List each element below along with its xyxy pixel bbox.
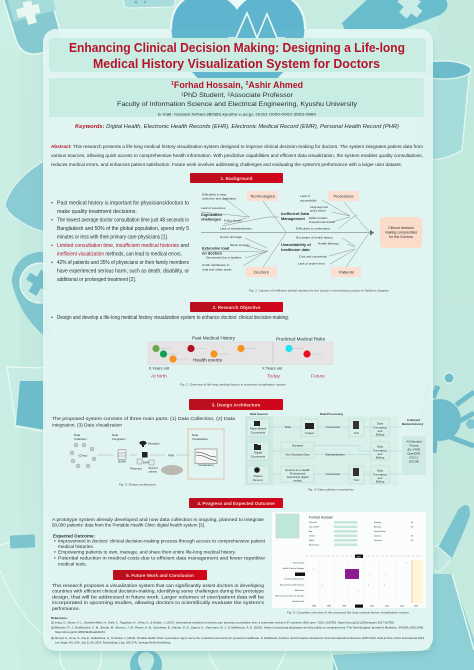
source: patient memory: Memory xyxy=(253,478,264,482)
age ruler: 0000 xyxy=(356,556,361,558)
effect box: clinical decision making complexities: for the Doctors xyxy=(389,235,413,239)
conclusion paragraph xyxy=(52,583,265,612)
column labels: Data Processing xyxy=(320,412,343,416)
collected medical history box: Format xyxy=(410,444,419,448)
section labels: Integration xyxy=(112,437,126,441)
fishbone cause labels: policy issues xyxy=(310,208,326,212)
health event dots xyxy=(152,345,322,363)
timeline band xyxy=(148,342,333,364)
timeline headings xyxy=(192,336,326,342)
icon: leaf shape left xyxy=(5,160,46,232)
patient info fields: Alcoholic xyxy=(374,526,381,528)
category row labels: Immunization xyxy=(293,562,304,564)
fishbone cause labels: Lack of resources xyxy=(201,206,226,210)
row 3: data formatting xyxy=(371,466,389,484)
caption: fig 2: Fig. 2. Overview of life-long medical history in proposed visualization system xyxy=(180,382,287,386)
icon: stethoscope lines bottom xyxy=(60,645,338,670)
progress paragraph xyxy=(52,517,264,528)
effect box: clinical decision making complexities: making complexities xyxy=(385,230,417,234)
processing background xyxy=(245,416,398,486)
heading: 5. Future Work and Conclusion xyxy=(113,570,207,580)
collected medical history box: DICOM) xyxy=(409,460,419,464)
cause box: Technologies xyxy=(247,191,278,201)
fishbone cause labels: rural and urban areas xyxy=(202,268,232,272)
category row labels: Non-Communicable Disease xyxy=(280,584,304,586)
connector lines xyxy=(97,454,190,456)
year axis xyxy=(312,606,418,608)
icon: bandage top left xyxy=(2,0,64,54)
year axis: 1980 xyxy=(312,606,316,608)
chart: life-long medical history timeline xyxy=(148,336,333,386)
cause box: Patients: Patients xyxy=(339,270,354,274)
patient info fields: Gender xyxy=(309,536,315,538)
row 1: scan, images, conversion, text xyxy=(285,419,364,436)
fishbone cause labels: collection and digitization xyxy=(202,196,237,200)
effect box: clinical decision making complexities: Clinical decision xyxy=(388,226,414,230)
row 2: standard data xyxy=(281,442,345,458)
conclusion paragraph: incorporated in upcoming studies, allowing doctors to scientifically evaluate the system's xyxy=(52,600,265,606)
conclusion paragraph: design, that will be addressed in future work. Larger volumes of user/patient data will be xyxy=(52,594,264,600)
patient info fields: No xyxy=(411,522,413,524)
small event marks xyxy=(313,562,407,592)
row 3: queries, conversion, text: Queries by a Health xyxy=(285,468,310,472)
year axis: 2015 xyxy=(400,606,404,608)
data visualization box: Visualization xyxy=(198,463,214,467)
section labels: Data xyxy=(192,433,198,437)
row 3: queries, conversion, text: Text xyxy=(354,478,359,482)
heading: 2. Research Objective xyxy=(190,302,283,312)
event popup: purple xyxy=(345,569,359,579)
row 3: queries, conversion, text: (Voice/Text digital xyxy=(287,475,309,479)
expected outcome list: Empowering patients to own, manage, and share their entire life-long medical history. xyxy=(58,550,236,556)
oval: patient xyxy=(161,465,183,475)
cloud and server icons: Education xyxy=(148,442,160,446)
timeline grid and highlighted year xyxy=(412,560,423,603)
chart: fishbone diagram xyxy=(201,191,422,292)
fishbone cause labels: Difficulties in data xyxy=(202,192,226,196)
category row labels: Mental & Social Status & Disorder xyxy=(276,594,304,598)
authors block: Faculty of Information Science and Electrical Engineering, Kyushu University xyxy=(117,101,358,108)
authors block: ¹PhD Student, ²Associate Professor xyxy=(181,92,293,99)
source: paper based documents: Paper-Based xyxy=(250,426,267,430)
patient info fields: No xyxy=(411,536,413,538)
fishbone cause labels: healthcare data xyxy=(281,247,310,252)
references: [1] Irving, G., Neves, A. L., Dambha-Miller, H., Oishi, A., Tagashira, H., Verho, A., & Holden, J. (2017). International variations in primary care physician consultation time: a systematic review of 67 countries. BMJ open, 7(10), e017902. https://doi.org/10.1136/bmjopen-2017-017902 xyxy=(51,620,394,624)
section labels: Data xyxy=(74,433,80,437)
patient info fields: Patient ID xyxy=(309,521,318,524)
conclusion paragraph: countries with efficient clinical decision-making, identifying some challenges during the prototype xyxy=(52,589,264,595)
chart: life-long medical history timeline: Today xyxy=(267,374,281,378)
fishbone cause labels: Management xyxy=(281,216,305,221)
source: patient memory: Patient xyxy=(254,474,263,478)
caption: fig 1: Fig. 1. Causes of inefficient clinical decision by the doctors in developing country in fishbone diagram xyxy=(249,288,390,292)
keywords: Keywords: Digital Health, Electronic Health Records (EHR), Electronic Medical Record (EMR), Personal Health Record (PHR) xyxy=(75,124,399,130)
fishbone cause labels: Extensive load xyxy=(202,246,230,250)
expected outcome list: • xyxy=(54,556,56,561)
background bullet list: • xyxy=(51,218,53,224)
row 3: data formatting: Formatting xyxy=(373,472,387,476)
fishbone cause labels: Not aware of health history xyxy=(296,236,333,240)
fishbone cause labels: Cost and complexity xyxy=(299,254,327,258)
category row labels: Health Checkup Findings xyxy=(283,567,304,570)
caption: fig 3: Fig. 3. Design architecture xyxy=(119,482,156,486)
design architecture paragraph: Integration, (3) Data Visualization xyxy=(52,422,122,428)
panel shadow xyxy=(44,33,434,655)
background bullet list: • xyxy=(51,260,53,266)
title block: Medical History Visualization System for Doctors xyxy=(93,57,380,71)
fishbone spine and bones xyxy=(201,198,374,267)
icon: pill top right xyxy=(342,0,448,32)
abstract xyxy=(51,144,424,167)
patient info fields: No xyxy=(411,526,413,528)
patient info fields: No xyxy=(411,540,413,542)
fishbone cause labels: Demotivated due to facilities xyxy=(206,256,242,260)
cause box: Doctors: Doctors xyxy=(254,270,269,274)
row 1: data formatting: and xyxy=(378,429,383,433)
row 2: data formatting: Editing xyxy=(376,456,385,460)
timeline axis labels xyxy=(149,366,282,370)
source: patient memory xyxy=(247,466,269,484)
expected outcome list: • xyxy=(54,540,56,545)
cloud and server icons: opinion xyxy=(148,470,158,474)
cause box: Doctors xyxy=(246,267,277,277)
column labels: Data Sources xyxy=(250,412,268,416)
row 1: data formatting xyxy=(371,419,389,436)
background bullet list: Bangladesh and 50% of the global population, spend only 5 xyxy=(57,226,189,232)
research objective bullet: Design and develop a life-long medical history visualization system to enhance doctors' clinical decision-making. xyxy=(57,315,289,321)
chart: life-long medical history timeline: Health events xyxy=(193,358,223,362)
icon: location pin bottom xyxy=(130,649,162,670)
connector lines xyxy=(269,427,402,474)
heading: 1. Background xyxy=(190,173,283,183)
patient info fields: Age xyxy=(309,530,312,533)
references xyxy=(51,616,424,644)
heading: 3. Design Architecture xyxy=(189,399,283,410)
expected outcome list xyxy=(53,534,266,567)
row 2: standard data: Standard xyxy=(292,444,304,448)
research objective bullet: • xyxy=(51,315,53,321)
year axis: 1990 xyxy=(342,606,346,608)
conclusion paragraph: performance. xyxy=(52,606,80,612)
column labels xyxy=(250,412,424,426)
heading: 4. Progress and Expected Outcome xyxy=(189,498,283,508)
row 1: data formatting: Formatting xyxy=(373,426,387,430)
fishbone cause labels xyxy=(201,192,339,272)
fishbone cause labels: Inefficient Data xyxy=(281,211,310,216)
row 1: scan, images, conversion, text: Conversion xyxy=(326,425,341,429)
row 3: queries, conversion, text: Conversion xyxy=(326,472,341,476)
caption: fig 4: Fig. 4. Data collection mechanism xyxy=(308,488,355,492)
data visualization box xyxy=(188,429,224,479)
patient info fields xyxy=(309,521,413,546)
fishbone cause labels: Lack of standardization xyxy=(220,226,252,230)
references: [2] Blendon, R. J., DesRoches, C. M., Brodie, M., Benson, J. M., Rosen, A. B., Schneider, E., Altman, D. E., Zapert, K., Herrmann, M. J., & Steffenson, A. E. (2002). Views of practicing physicians and the public on medical errors. The New England Journal of Medicine, 347(24),1933-1940. xyxy=(51,626,424,630)
icon: heart outline xyxy=(171,0,305,115)
authors block: ¹Forhad Hossain, ²Ashir Ahmed xyxy=(171,80,303,91)
background bullet list: have experienced serious harm, such as death, disability, or xyxy=(57,268,189,274)
fishbone cause labels: Health illiteracy xyxy=(318,242,339,246)
abstract: Abstract: This research presents a life-long medical history visualization system designed to improve clinical decision-making for doctors. The system integrates patient data from xyxy=(51,144,424,149)
icon: syringe left xyxy=(0,534,50,640)
selected row tag xyxy=(295,572,305,576)
patient info fields: Mobile xyxy=(309,540,314,542)
chart: life-long medical history timeline: Future xyxy=(311,374,325,378)
fishbone cause labels: Difficulties to understand xyxy=(296,226,330,230)
cause box: Procedures: Procedures xyxy=(334,194,354,198)
timeline headings: Predicted Medical Risks xyxy=(276,336,326,342)
category row labels xyxy=(276,562,304,603)
age ruler xyxy=(306,554,422,558)
progress paragraph: A prototype system already developed and now data collection is ongoing, planned to integrate xyxy=(52,517,264,523)
row 1: scan, images, conversion, text: Images xyxy=(305,431,315,435)
row 3: data formatting: Data xyxy=(377,468,383,472)
data collection icons xyxy=(70,443,96,468)
icon: ECG line on heart xyxy=(228,13,285,38)
icon: flask bottom right xyxy=(333,574,474,670)
timeline axis labels: X Years old xyxy=(262,366,282,370)
background bullet list: make quality treatment decisions. xyxy=(57,209,137,215)
fishbone cause labels: Lack of proper trust xyxy=(298,262,325,266)
background bullet list: 42% of patients and 35% of physicians or their family members xyxy=(57,260,189,266)
references: References: xyxy=(51,616,68,620)
cloud and server icons: Second xyxy=(148,466,158,470)
row 2: data formatting: Formatting xyxy=(373,448,387,452)
authors block xyxy=(49,78,424,117)
background bullet list: additional or prolonged treatment [2]. xyxy=(57,277,136,283)
caption: fig 5: Fig. 5. Complete overview of the proposed life-long medical history visualization system xyxy=(287,610,410,614)
section labels: Data xyxy=(112,433,118,437)
column labels: Medical History xyxy=(402,422,424,426)
section labels: Visualization xyxy=(192,437,209,441)
patient info fields: Family History xyxy=(374,530,385,533)
timeline headings: Past Medical History xyxy=(192,336,236,340)
source: paper based documents xyxy=(247,419,269,436)
references: https://doi.org/10.1056/NEJMsa022151 xyxy=(55,630,105,634)
icon: small box top centre xyxy=(123,0,175,8)
row 2: standard data: Non-Standard Data xyxy=(285,453,310,457)
patient info fields: Smoking xyxy=(374,522,381,524)
source: paper based documents: Documents xyxy=(251,430,266,434)
authors block: E-mail: hossain.forhad.380@s.kyushu-u.ac.jp, Orcid: 0000-0002-3593-0860 xyxy=(158,112,316,116)
year axis: 1985 xyxy=(327,606,331,608)
timeline axis labels: 0 Years old xyxy=(149,366,169,370)
abstract: reduces medical errors, and enhances patient satisfaction. Future work involves addressing challenges and evaluating the system's performance with a larger user dataset. xyxy=(51,162,402,167)
section labels: Collection xyxy=(74,437,87,441)
source: digital documents: Digital xyxy=(254,450,262,454)
year axis: 2005 xyxy=(370,606,374,608)
year axis: 2020 xyxy=(414,606,418,608)
abstract: various sources, allowing quick access to comprehensive health information. With predictive capabilities and efficient data visualization, the system enables quality consultations, xyxy=(51,153,423,158)
collected medical history box: (Ex. FHIR, xyxy=(407,448,421,452)
expected outcome list: Improvement in doctors' clinical decision-making process through access to comprehensive patient xyxy=(58,539,266,545)
icon: location pin with cross left xyxy=(12,252,60,340)
main poster panel xyxy=(43,29,433,651)
fishbone cause labels: Policy issues xyxy=(224,218,242,222)
source: digital documents xyxy=(247,442,269,460)
title block xyxy=(49,38,426,72)
icon: cylinder right xyxy=(415,61,471,160)
fishbone cause labels: irrelevant information xyxy=(309,220,336,224)
expected outcome list: • xyxy=(54,551,56,556)
fishbone cause labels: on doctors xyxy=(202,250,222,256)
patient photo placeholder xyxy=(276,514,299,538)
row 2: standard data: Standardization xyxy=(325,453,345,457)
expected outcome list: medical tests. xyxy=(58,561,87,567)
background bullet list: inefficient visualization methods, can lead to medical errors. xyxy=(57,252,182,258)
expected outcome list: medical histories. xyxy=(58,544,94,550)
fishbone cause labels: Digitization xyxy=(201,212,223,217)
background bullet list: minutes or less with their primary care physicians [1]. xyxy=(57,234,168,240)
category row labels: Communicable Disease xyxy=(284,578,304,580)
row 1: scan, images, conversion, text: Text xyxy=(354,431,359,435)
heading: 1. Background: 1. Background xyxy=(221,176,253,181)
source: digital documents: Documents xyxy=(251,454,266,458)
collected medical history box xyxy=(402,436,426,475)
category row labels: Medication xyxy=(295,589,304,592)
fishbone cause labels: Week strategy xyxy=(230,243,250,247)
patient info fields: Operation xyxy=(374,539,382,542)
chart: design architecture diagram: (Clinic) xyxy=(79,454,87,458)
fishbone cause labels: challenges xyxy=(201,216,221,222)
collected medical history box: All Standard xyxy=(406,440,422,444)
design architecture paragraph: The proposed system consists of three main parts: (1) Data Collection, (2) Data xyxy=(52,416,235,422)
chart: design architecture diagram xyxy=(70,429,224,486)
expected outcome list: Potential reduction in medical costs due to efficient data management and fewer repetitive xyxy=(58,555,265,561)
cause box: Procedures xyxy=(328,191,359,201)
collected medical history box: OpenEHR, xyxy=(407,452,421,456)
section labels xyxy=(74,433,209,441)
fishbone cause labels: Unavailability of xyxy=(281,242,312,247)
effect box: clinical decision making complexities xyxy=(380,217,422,248)
heart seen through panel xyxy=(172,29,304,115)
expected outcome list: Expected Outcome: xyxy=(53,534,95,540)
row 2: data formatting: and xyxy=(378,452,383,456)
design architecture paragraph xyxy=(52,416,235,428)
background bullet list: The lowest average doctor consultation time just 48 seconds in xyxy=(57,218,189,224)
fishbone cause labels: accessibility xyxy=(300,198,317,202)
chart: data collection mechanism xyxy=(245,412,426,492)
year axis: 2010 xyxy=(385,606,389,608)
integration icon: database xyxy=(118,450,126,464)
figure: visualization system screenshot xyxy=(272,512,426,608)
heading: 3. Design Architecture: 3. Design Architecture xyxy=(212,402,261,408)
cloud and server icons: PHR xyxy=(168,454,174,458)
background bullet list xyxy=(51,200,189,283)
background bullet list: Limited consultation time, insufficient medical histories and xyxy=(57,243,189,249)
row 3: queries, conversion, text xyxy=(281,466,364,484)
cloud and server icons: EHR xyxy=(143,460,149,464)
cloud and server icons: Pharmacy xyxy=(130,466,143,470)
title block: Enhancing Clinical Decision Making: Designing a Life-long xyxy=(69,41,405,55)
background bullet list: Past medical history is important for physicians/doctors to xyxy=(57,200,189,206)
background bullet list: • xyxy=(51,243,53,249)
fishbone cause labels: Lack of xyxy=(300,194,310,198)
heading: 5. Future Work and Conclusion: 5. Future Work and Conclusion xyxy=(126,573,194,578)
cause box: Patients xyxy=(331,267,361,277)
fishbone cause labels: Doctor shortage xyxy=(220,235,242,239)
references: [3] Ahmed, A., Inoue, S., Kai, E., Nakashima, N., & Nohara, Y. (2013). Portable Health Clinic: A pervasive way to serve the unreached community for preventive healthcare. In Distributed, Ambient, and Pervasive Interactions: First International Conference, DAPI 2013, Held as Part of HCI International 2013 xyxy=(51,636,424,640)
icon: box left xyxy=(7,367,46,432)
row 3: queries, conversion, text: Professional xyxy=(290,472,306,476)
row 2: data formatting: Data xyxy=(377,444,383,448)
row 3: data formatting: and xyxy=(378,476,383,480)
cause box: Technologies: Technologies xyxy=(250,194,275,198)
heading: 2. Research Objective: 2. Research Objective xyxy=(213,305,261,310)
progress paragraph: 50,000 patients' data from the Portable Health Clinic digital health system [3]. xyxy=(52,522,205,528)
cloud and server icons xyxy=(130,441,174,474)
conclusion paragraph: This research proposes a visualization system that can significantly assist doctors in developing xyxy=(52,583,264,589)
references: Las Vegas, NV, USA, July 21-26, 2013. Proceedings 1 (pp. 265-274). Springer Berlin Heidelberg. xyxy=(55,640,171,644)
category row labels: Mental Health xyxy=(292,600,304,603)
row 3: queries, conversion, text: media) xyxy=(293,478,302,482)
icon: virus right xyxy=(419,373,474,453)
fishbone cause labels: EHRs contains xyxy=(309,216,328,220)
fishbone cause labels: Unfair distribution in xyxy=(202,263,230,267)
patient name: Forhad Hossain xyxy=(309,516,333,520)
collected medical history box: ICD-11, xyxy=(409,456,419,460)
background bullet list: • xyxy=(51,200,53,206)
patient info fields: Date of Birth xyxy=(309,526,319,528)
column labels: Collected xyxy=(407,418,420,422)
chart: life-long medical history timeline: At birth xyxy=(151,374,167,378)
row 1: data formatting: Editing xyxy=(376,432,385,436)
row 3: data formatting: Editing xyxy=(376,480,385,484)
icon: capsule right xyxy=(433,505,470,572)
row 1: scan, images, conversion, text: Scan xyxy=(285,425,292,429)
fishbone cause labels: Language and xyxy=(310,205,328,209)
patient info fields: Blood Group xyxy=(309,544,319,546)
row 1: data formatting: Data xyxy=(377,422,383,426)
row 2: data formatting xyxy=(371,442,389,460)
heading: 4. Progress and Expected Outcome: 4. Progress and Expected Outcome xyxy=(197,501,275,506)
patient info fields: Diabetes xyxy=(374,534,381,538)
integration icon: database: (EHR) xyxy=(118,460,126,464)
